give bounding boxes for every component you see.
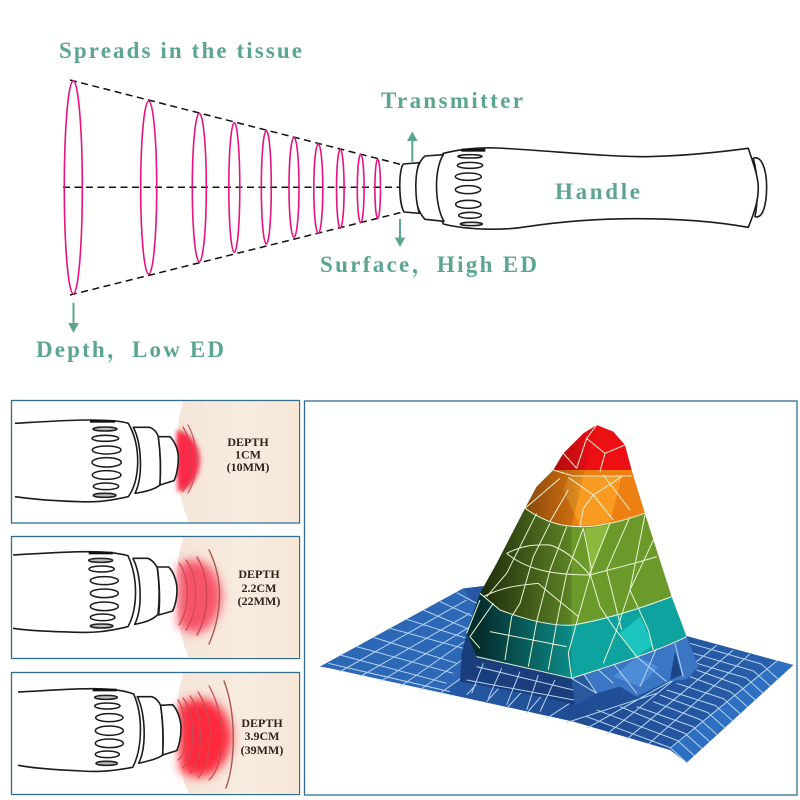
grip bar xyxy=(461,149,485,152)
panel: depth 2.2 cm xyxy=(12,536,300,658)
large handpiece xyxy=(400,148,767,229)
depth text: (39MM) xyxy=(241,743,283,757)
panel: energy distribution surface xyxy=(304,401,797,795)
3D surface plot xyxy=(320,425,793,763)
lighter plate edge strip xyxy=(670,661,793,763)
depth text: (10MM) xyxy=(227,460,269,474)
skin xyxy=(177,402,299,522)
orange band highlight xyxy=(563,476,622,526)
left side shadow xyxy=(467,425,597,678)
label: handle: Handle xyxy=(555,179,640,204)
wave cone diagram xyxy=(63,80,403,295)
teal band highlight xyxy=(620,617,653,657)
foot mesh xyxy=(467,643,683,712)
arrow: down to surface xyxy=(395,219,405,247)
heading: spreads in the tissue: Spreads in the tissue xyxy=(59,38,302,63)
orange band xyxy=(525,470,645,527)
label: surface high ED: Surface，High ED xyxy=(320,252,537,278)
handpiece xyxy=(13,552,177,632)
label: depth low ED: Depth，Low ED xyxy=(36,337,224,363)
handpiece xyxy=(15,420,178,502)
blue right foot xyxy=(572,637,698,705)
depth text: 2.2CM xyxy=(242,581,276,595)
arrow: down to depth xyxy=(68,303,79,333)
handpiece xyxy=(18,689,181,771)
dark blue mound foot xyxy=(460,633,575,705)
light facet on right foot xyxy=(613,657,658,687)
red pulse glow xyxy=(178,681,233,788)
red pulse glow xyxy=(178,550,222,644)
arrow: up to transmitter xyxy=(407,132,418,162)
depth text: 3.9CM xyxy=(244,729,280,743)
red pulse glow xyxy=(176,425,200,493)
panel: depth 3.9 cm xyxy=(12,672,300,794)
lighter left wing xyxy=(320,588,477,692)
depth text: 1CM xyxy=(235,448,261,462)
cone dashed guide lines xyxy=(63,80,403,295)
transmitter tip xyxy=(400,163,419,213)
skin xyxy=(177,674,299,794)
plate base mesh xyxy=(328,593,778,763)
depth text: DEPTH xyxy=(227,435,269,449)
green band xyxy=(480,508,672,625)
depth text: DEPTH xyxy=(238,567,280,581)
red band xyxy=(553,425,632,470)
dark facet on right foot xyxy=(572,675,597,705)
label: transmitter: Transmitter xyxy=(381,88,523,113)
depth text: DEPTH xyxy=(241,716,283,730)
panel: depth 1 cm xyxy=(12,400,300,523)
teal band xyxy=(467,593,687,678)
blue base plate xyxy=(320,586,793,763)
pink wavefront ellipses xyxy=(64,81,381,294)
handle body xyxy=(436,148,758,229)
depth text: (22MM) xyxy=(238,594,280,608)
handle end cap xyxy=(753,158,767,217)
skin xyxy=(177,538,299,658)
green band highlight xyxy=(585,525,610,575)
grip ovals xyxy=(455,155,483,226)
neck xyxy=(415,155,444,221)
mound mesh lines xyxy=(467,425,687,678)
dark foot dent xyxy=(670,652,682,680)
